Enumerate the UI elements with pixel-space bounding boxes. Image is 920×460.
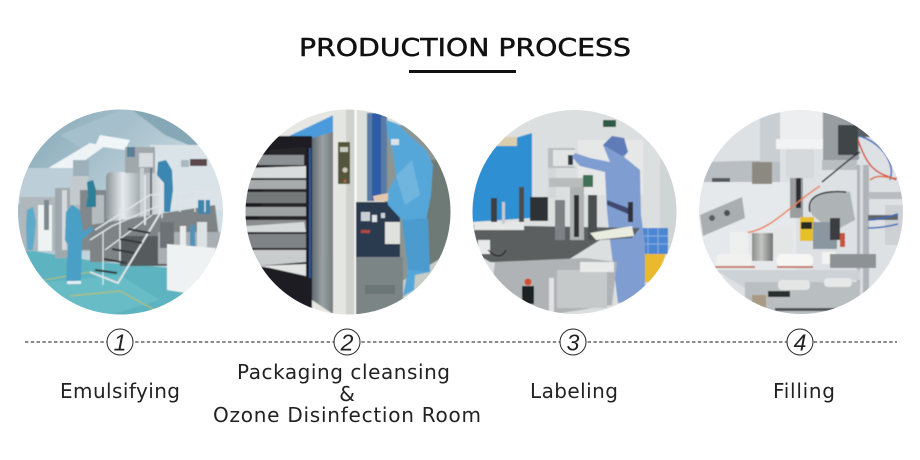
- title underline: [409, 70, 516, 73]
- label: Packaging cleansing & Ozone Disinfection Room: [213, 360, 481, 427]
- control panel: [338, 142, 350, 184]
- title: PRODUCTION PROCESS: [299, 33, 631, 62]
- worker front: [65, 205, 93, 282]
- lower machinery: [90, 205, 222, 262]
- photo: emulsifying room: [15, 108, 227, 318]
- machine body: [356, 257, 403, 317]
- label: Filling: Filling: [773, 379, 835, 403]
- column: [857, 165, 869, 295]
- step marker 1: [107, 329, 133, 356]
- step marker 4: [787, 329, 813, 356]
- blue wall: [470, 133, 532, 222]
- label: Packaging cleansing & Ozone Disinfection Room: Ozone Disinfection Room: [213, 403, 481, 427]
- crate and bin: [638, 228, 668, 254]
- worker mid: [86, 180, 96, 207]
- right actuator: [823, 112, 859, 160]
- ceiling and wall: [18, 110, 223, 268]
- control box: [548, 148, 575, 168]
- filling head: [780, 110, 822, 140]
- step marker 3: 3: [567, 330, 580, 356]
- background machines: [20, 197, 90, 251]
- stairs: [90, 175, 222, 285]
- step marker 4: 4: [794, 330, 806, 356]
- lower mechanism: [745, 282, 860, 317]
- photo: filling machine: [696, 108, 908, 318]
- floor: [26, 250, 184, 314]
- machine base: [490, 258, 617, 314]
- blue wall: [289, 115, 334, 139]
- divider: [355, 108, 356, 318]
- worker on platform: [157, 160, 173, 212]
- table and cups: [715, 270, 860, 288]
- control box: [356, 202, 400, 258]
- worker: [386, 120, 433, 296]
- upper plate: [700, 160, 780, 182]
- air lines: [743, 136, 898, 233]
- window: [578, 140, 643, 195]
- label: Emulsifying: Emulsifying: [60, 379, 180, 403]
- mid block: [811, 191, 855, 228]
- photo: packaging cleansing and ozone room: [244, 108, 455, 318]
- white cabinet: [167, 244, 216, 296]
- right rails: [868, 192, 908, 199]
- step marker 2: [334, 329, 360, 356]
- worker: [572, 136, 645, 303]
- white frame: [332, 112, 340, 135]
- step marker 2: 2: [340, 330, 354, 356]
- label: Packaging cleansing & Ozone Disinfection Room: &: [339, 382, 355, 406]
- exit sign: [603, 120, 616, 127]
- rack: [244, 136, 312, 316]
- label: Labeling: Labeling: [530, 379, 618, 403]
- blue strip: [367, 113, 387, 201]
- step marker 1: 1: [114, 330, 126, 356]
- step marker 3: [560, 329, 586, 356]
- cylinder: [752, 233, 773, 261]
- label: Packaging cleansing & Ozone Disinfection Room: Packaging cleansing: [237, 360, 450, 384]
- dashed timeline: [25, 341, 897, 343]
- turntable machinery: [470, 225, 640, 265]
- door: [312, 132, 333, 314]
- sensors: [800, 217, 814, 241]
- worker far: [26, 207, 36, 250]
- mixing tank: [106, 172, 162, 222]
- photo: labeling machine: [470, 108, 680, 320]
- right background: [358, 110, 401, 202]
- tilted plate: [700, 197, 745, 236]
- paper: [385, 222, 400, 244]
